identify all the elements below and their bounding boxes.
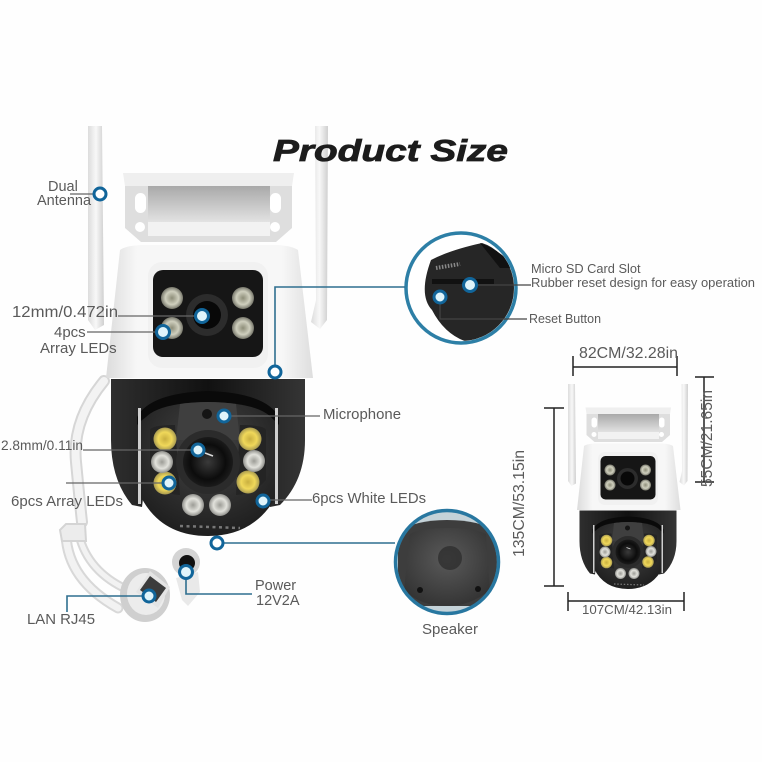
infographic canvas	[2, 126, 754, 637]
label: power: 12V2A	[256, 593, 300, 609]
label: 4pcs array LEDs: Array LEDs	[40, 340, 117, 357]
connector: power	[172, 548, 200, 606]
dimension: antenna height 55cm: 55CM/21.65in	[699, 390, 716, 487]
leader lines	[66, 194, 531, 612]
dimension: width 82cm	[573, 345, 678, 376]
label: LAN RJ45: LAN RJ45	[27, 611, 95, 628]
label: 6pcs array LEDs: 6pcs Array LEDs	[11, 493, 123, 510]
small camera with dimensions	[511, 345, 716, 617]
label: speaker: Speaker	[422, 621, 478, 638]
label: 4pcs array LEDs: 4pcs	[54, 324, 86, 341]
label: 6pcs white LEDs: 6pcs White LEDs	[312, 490, 426, 507]
label: 2.8mm lens: 2.8mm/0.11in	[1, 438, 83, 453]
label: power: Power	[255, 578, 296, 594]
label: dual antenna: Dual	[48, 179, 78, 195]
main camera	[88, 126, 328, 536]
dimension: height 135cm: 135CM/53.15in	[511, 450, 528, 557]
label: micro SD card slot: Micro SD Card Slot	[531, 261, 641, 276]
dimension: height 135cm	[511, 408, 564, 586]
detail circle: speaker	[396, 510, 498, 614]
label: reset button: Reset Button	[529, 312, 601, 326]
dimension: width 82cm: 82CM/32.28in	[579, 345, 678, 362]
label: microphone: Microphone	[323, 407, 401, 423]
connector: LAN RJ45	[120, 568, 170, 622]
camera cable	[60, 381, 128, 608]
title: Product Size	[273, 133, 508, 168]
label: 12mm lens: 12mm/0.472in	[12, 304, 118, 321]
label: dual antenna: Antenna	[37, 193, 92, 209]
callout markers	[94, 188, 476, 602]
label: micro SD card slot: Rubber reset design for easy operation	[531, 275, 755, 290]
detail circle: SD card slot	[406, 233, 520, 345]
dimension: depth 107cm	[568, 592, 684, 617]
dimension: depth 107cm: 107CM/42.13in	[582, 602, 672, 617]
